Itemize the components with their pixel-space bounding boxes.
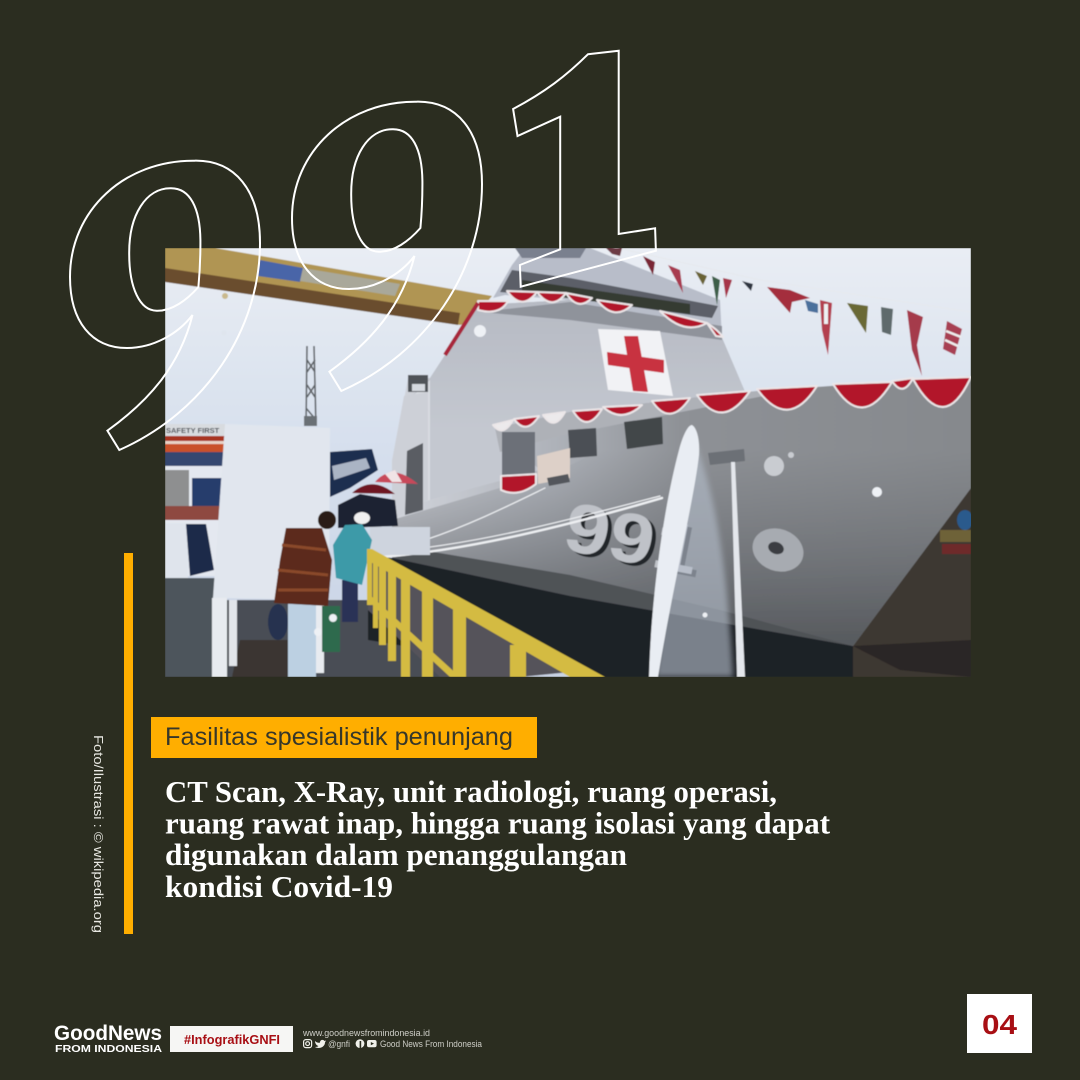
amber vertical bar [124,553,133,934]
ship side openings [405,417,663,515]
shipyard building with safety sign [165,424,225,579]
sky [165,248,971,677]
railing deck panel [370,527,430,555]
outline digit 9 left [70,161,260,450]
yellow safety railing [367,549,605,677]
body text: kondisi Covid-19 [165,869,393,904]
icon: instagram [304,1040,312,1048]
outline digit 9 middle [292,102,482,391]
icon: youtube [367,1040,377,1047]
page number box: 04 [982,1009,1017,1040]
website and social handles: Good News From Indonesia [380,1039,482,1049]
mooring ropes [382,488,662,557]
icon: twitter [315,1040,326,1048]
mooring ring on bow [752,528,804,572]
water droplets on lens [222,293,882,636]
photo: hospital ship 991 at shipyard [165,244,973,677]
outline number 991 [70,51,656,450]
photo credit vertical: Foto/Ilustrasi : © wikipedia.org [91,735,106,933]
website and social handles: @gnfi [328,1039,350,1049]
small tower on ship [392,375,428,520]
body text: digunakan dalam penanggulangan [165,837,627,872]
dark boat [330,449,378,497]
website and social handles: www.goodnewsfromindonesia.id [302,1028,430,1038]
hashtag badge [170,1026,293,1052]
signal flags [600,244,971,376]
red and white bunting swags [445,291,971,493]
bridge superstructure [480,248,722,340]
outline digit 1 [513,51,656,287]
umbrellas and crowd [338,470,418,528]
medical red cross emblem [598,329,673,396]
icon: facebook [356,1039,364,1048]
hashtag badge: #InfografikGNFI [184,1032,280,1047]
hull number 991: 991 [562,490,710,592]
anchor pole [708,449,745,677]
website and social handles [302,1028,482,1049]
water jet spray [649,425,733,677]
subheading tag: Fasilitas spesialistik penunjang [165,723,513,751]
crane beam [165,248,492,325]
subheading tag [151,717,537,758]
hull number 991 [566,504,697,578]
shipyard building with safety sign: SAFETY FIRST [166,426,220,435]
hull number 991: 991 [558,487,706,589]
tower mast [304,346,317,426]
body text: ruang rawat inap, hingga ruang isolasi yang dapat [165,806,831,840]
ship body [392,300,971,646]
man in batik shirt [268,511,336,677]
page number box [967,994,1032,1053]
green cart [322,606,340,652]
white panel [212,424,330,677]
logo GoodNews From Indonesia: GoodNews [54,1022,162,1045]
logo GoodNews From Indonesia [54,1022,162,1055]
dark water and hull shadow [368,488,973,677]
logo GoodNews From Indonesia: FROM INDONESIA [55,1043,162,1055]
body text: CT Scan, X-Ray, unit radiologi, ruang operasi, [165,774,777,809]
person in teal raincoat [333,512,372,622]
body text [165,774,831,904]
wet ground and walkway [165,578,466,677]
